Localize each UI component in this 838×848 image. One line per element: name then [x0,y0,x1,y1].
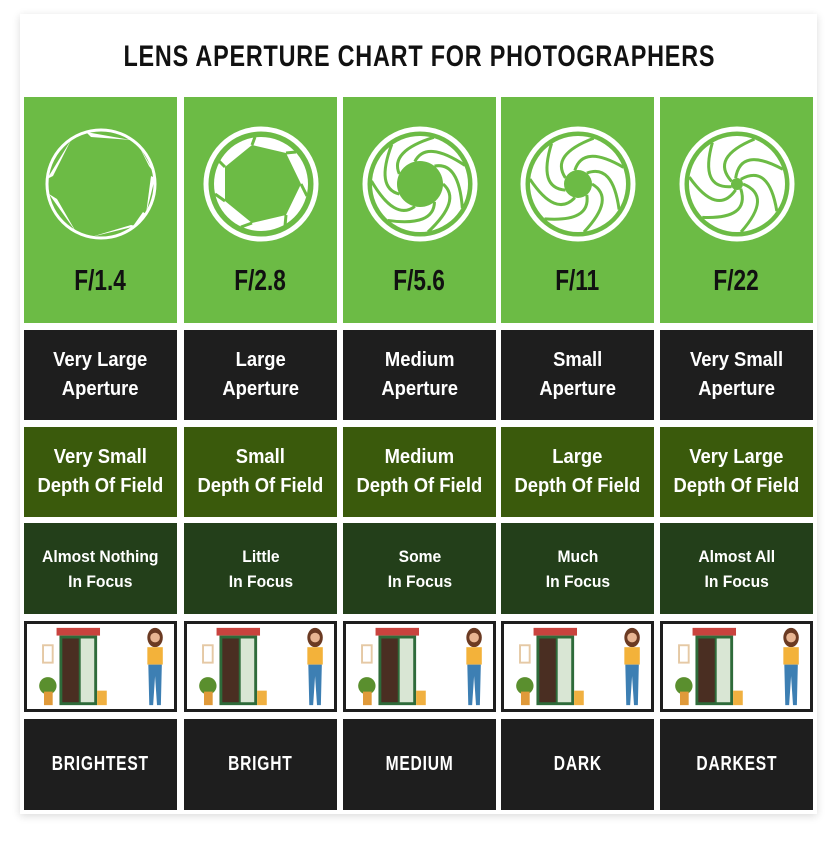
row: aperture size [24,330,813,420]
row: depth of field: Depth Of Field [357,475,482,497]
icon: aperture F/5.6 [362,126,478,242]
row: aperture size: Small [553,349,602,371]
row: depth of field: Medium [385,446,454,468]
column 3: F/5.6 [343,97,496,323]
row: focus: Little [242,546,279,566]
column 4: F/11 [501,97,654,323]
row: depth of field: Depth Of Field [38,475,163,497]
row: depth of field: Large [552,446,603,468]
icon: aperture F/22 [680,126,794,242]
column 1: F/1.4 [24,97,177,323]
row: focus: In Focus [704,572,769,590]
row: aperture size: Medium [385,349,454,371]
column 4: F/11: F/11 [555,265,600,297]
row: focus: Much [557,546,598,566]
row: focus: In Focus [68,572,133,590]
row: brightness: BRIGHTEST [52,753,149,775]
row: aperture size: Aperture [222,378,299,400]
row: depth of field: Depth Of Field [674,475,799,497]
row: aperture size: Aperture [62,378,139,400]
row: example images [24,621,813,712]
row: depth of field [24,427,813,517]
row: depth of field: Very Small [54,446,147,468]
row: focus: In Focus [545,572,610,590]
row: brightness: DARK [553,753,602,775]
row: aperture size: Very Large [53,349,148,371]
title: LENS APERTURE CHART FOR PHOTOGRAPHERS [124,40,715,73]
row: aperture size: Very Small [690,349,783,371]
row: focus: Some [398,546,441,566]
row: focus: In Focus [387,572,452,590]
row: focus [24,523,813,614]
row: brightness [24,719,813,810]
column 2: F/2.8: F/2.8 [235,265,286,297]
column 2: F/2.8 [184,97,337,323]
row: depth of field: Depth Of Field [198,475,323,497]
column 5: F/22: F/22 [714,265,759,297]
row: focus: Almost All [698,546,775,566]
label: F/1.4 [75,265,126,297]
row: focus: In Focus [228,572,293,590]
row: brightness: MEDIUM [386,753,453,775]
icon: aperture F/2.8 [204,126,318,242]
row: brightness: BRIGHT [228,753,293,775]
row: depth of field: Depth Of Field [515,475,640,497]
row: depth of field: Very Large [689,446,784,468]
row: aperture size: Aperture [539,378,616,400]
icon: aperture F/1.4 [46,128,156,240]
row: aperture size: Large [235,349,286,371]
column 3: F/5.6: F/5.6 [394,265,445,297]
row: focus: Almost Nothing [42,546,159,566]
row: aperture size: Aperture [698,378,775,400]
column 5: F/22 [660,97,813,323]
row: aperture size: Aperture [381,378,458,400]
row: brightness: DARKEST [696,753,777,775]
row: depth of field: Small [236,446,285,468]
icon: aperture F/11 [520,126,636,242]
